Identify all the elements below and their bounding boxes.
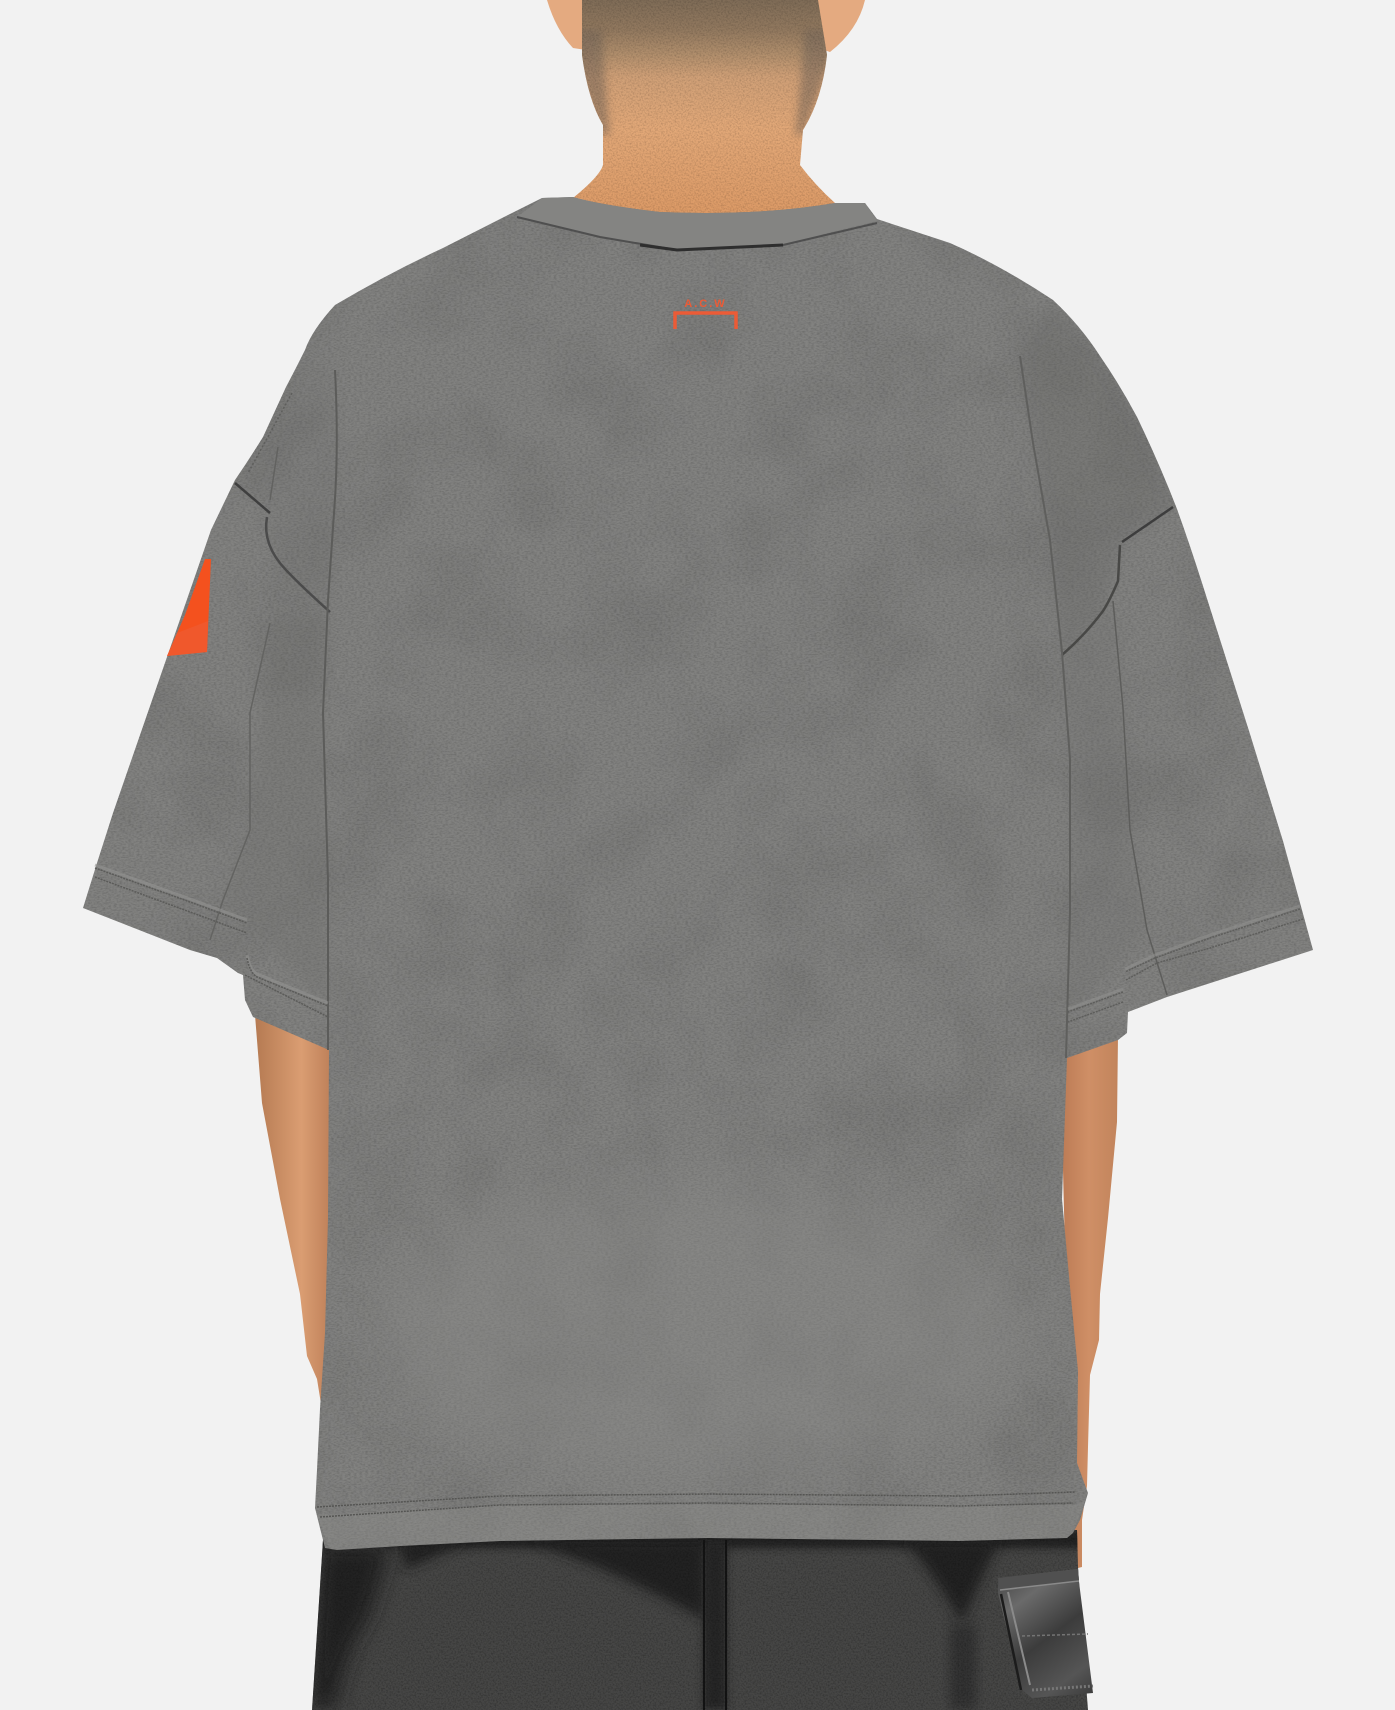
right ear (818, 0, 865, 52)
left sleeve seams (95, 370, 337, 1050)
logo lettering: A.C.W (684, 298, 727, 310)
fabric shading (60, 180, 1340, 1560)
hem stitching (317, 1492, 1075, 1517)
t-shirt silhouette (83, 197, 1313, 1550)
collar seam shadow (640, 245, 783, 250)
neck side shading (570, 0, 840, 215)
trousers fold shadows (300, 1530, 1100, 1710)
logo bracket (675, 313, 736, 329)
collar band (517, 197, 877, 250)
trousers (300, 1530, 1100, 1710)
right sleeve seams (1020, 356, 1303, 1058)
right arm (1060, 1035, 1118, 1570)
left arm (255, 1015, 332, 1410)
sleeve orange patch (167, 559, 211, 656)
trousers base (312, 1530, 1088, 1710)
head and neck (547, 0, 865, 215)
collar seam (517, 217, 877, 250)
left ear (547, 0, 586, 50)
neck skin (573, 0, 835, 215)
t-shirt (60, 180, 1340, 1560)
back neck logo (675, 298, 736, 329)
cargo pocket (998, 1569, 1093, 1698)
